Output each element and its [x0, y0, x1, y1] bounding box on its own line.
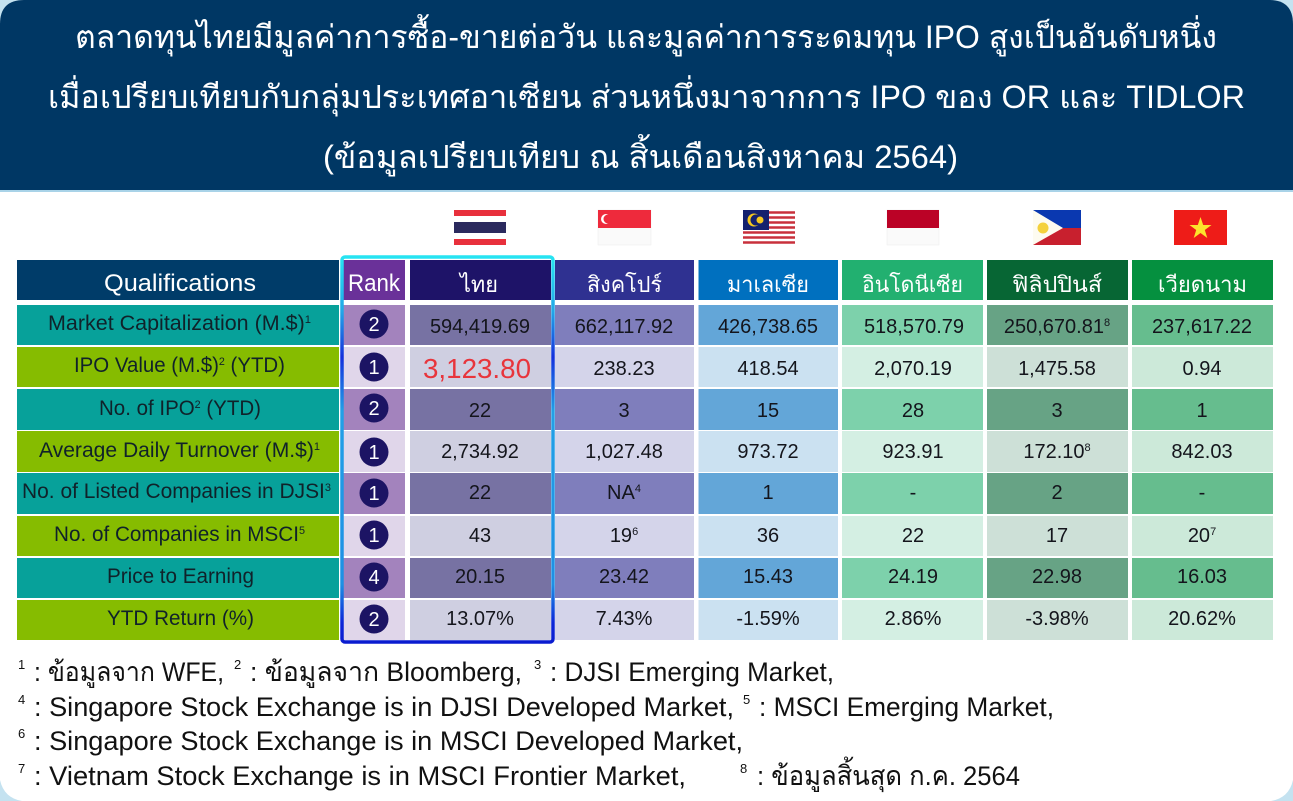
row: Market Capitalization: Market Capitalization (M.$)	[48, 312, 299, 335]
rank badges: 2	[368, 398, 380, 420]
row: Companies in MSCI: 7	[1210, 526, 1216, 538]
row: Market Capitalization: 1	[305, 314, 311, 326]
footnotes: 5	[743, 692, 750, 707]
row: Market Capitalization	[17, 305, 1273, 345]
rank badges: 2	[368, 609, 380, 631]
table header row	[17, 260, 1273, 300]
footnotes: : ข้อมูลสิ้นสุด ก.ค. 2564	[757, 756, 1020, 793]
row: Market Capitalization: 8	[1104, 317, 1110, 329]
row: Price to Earning: 15.43	[743, 566, 793, 588]
row: Companies in MSCI: No. of Companies in MSCI	[54, 523, 303, 546]
row: Market Capitalization: 237,617.22	[1152, 316, 1252, 338]
title banner: (ข้อมูลเปรียบเทียบ ณ สิ้นเดือนสิงหาคม 2564)	[323, 134, 958, 177]
row: Listed Companies in DJSI	[17, 473, 1273, 514]
row: No. of IPO: (YTD)	[201, 397, 261, 420]
footnotes: : ข้อมูลจาก WFE,	[34, 657, 224, 688]
row: No. of IPO	[17, 389, 1273, 430]
row: Market Capitalization: 518,570.79	[864, 316, 964, 338]
row: Price to Earning: 16.03	[1177, 566, 1227, 588]
row: Companies in MSCI: 6	[632, 526, 638, 538]
row: Listed Companies in DJSI: -	[910, 482, 916, 504]
rank badges: 1	[368, 525, 380, 547]
footnotes: : MSCI Emerging Market,	[759, 692, 1054, 722]
row: No. of IPO: 1	[1196, 400, 1208, 422]
row: YTD Return: -1.59%	[736, 608, 800, 630]
row: Average Daily Turnover: 1,027.48	[585, 441, 663, 463]
footnotes: : ข้อมูลจาก Bloomberg,	[250, 657, 522, 688]
table header row: ไทย	[458, 272, 498, 297]
table header row: อินโดนีเซีย	[862, 272, 963, 297]
row: No. of IPO: 15	[757, 400, 779, 422]
footnotes: : Singapore Stock Exchange is in MSCI Developed Market,	[34, 726, 743, 756]
footnotes: 3	[534, 657, 541, 672]
row: Average Daily Turnover: 842.03	[1171, 441, 1233, 463]
row: No. of IPO: 28	[902, 400, 924, 422]
row: Price to Earning	[17, 558, 1273, 598]
flag: Thailand	[454, 210, 506, 245]
table header row: Qualifications	[104, 270, 256, 297]
table header row: Rank	[348, 270, 401, 297]
row: Price to Earning: 22.98	[1032, 566, 1082, 588]
highlight box: Thailand column	[342, 257, 553, 642]
footnotes: : DJSI Emerging Market,	[550, 657, 834, 687]
row: IPO Value: 3,123.80	[423, 353, 531, 384]
row: Companies in MSCI: 5	[299, 525, 305, 537]
row: Market Capitalization: 426,738.65	[718, 316, 818, 338]
row: Market Capitalization: 594,419.69	[430, 316, 530, 338]
row: Average Daily Turnover: 973.72	[737, 441, 799, 463]
footnotes: 6	[18, 726, 25, 741]
footnotes: : Singapore Stock Exchange is in DJSI Developed Market,	[34, 692, 734, 722]
row: YTD Return: 20.62%	[1168, 608, 1236, 630]
footnotes	[18, 657, 1054, 793]
row: YTD Return: -3.98%	[1025, 608, 1089, 630]
row: IPO Value: 2,070.19	[874, 358, 952, 380]
row: IPO Value: 0.94	[1183, 358, 1221, 380]
footnotes: 4	[18, 692, 25, 707]
row: No. of IPO: 2	[195, 399, 201, 411]
footnotes: 1	[18, 657, 25, 672]
row: Average Daily Turnover: Average Daily Turnover (M.$)	[39, 439, 313, 462]
row: IPO Value: 1,475.58	[1018, 358, 1096, 380]
flag: Indonesia	[887, 210, 939, 245]
row: IPO Value: 238.23	[593, 358, 655, 380]
flag: Malaysia	[743, 210, 795, 245]
rank badges: 1	[368, 357, 380, 379]
row: Average Daily Turnover: 172.10	[1023, 441, 1085, 463]
row: Listed Companies in DJSI: -	[1199, 482, 1205, 504]
row: Price to Earning: Price to Earning	[107, 565, 254, 588]
row: No. of IPO: 3	[1051, 400, 1063, 422]
table header row: ฟิลิปปินส์	[1012, 272, 1103, 297]
table header row: มาเลเซีย	[727, 272, 809, 297]
title banner: ตลาดทุนไทยมีมูลค่าการซื้อ-ขายต่อวัน และมูลค่าการระดมทุน IPO สูงเป็นอันดับหนึ่ง	[75, 14, 1217, 57]
row: Listed Companies in DJSI: No. of Listed Companies in DJSI	[22, 480, 325, 503]
footnotes: 7	[18, 761, 25, 776]
row: Price to Earning: 20.15	[455, 566, 505, 588]
row: Price to Earning: 24.19	[888, 566, 938, 588]
row: Price to Earning: 23.42	[599, 566, 649, 588]
title banner	[0, 0, 1293, 190]
footnotes: : Vietnam Stock Exchange is in MSCI Frontier Market,	[34, 761, 686, 791]
row: Companies in MSCI: 43	[469, 525, 491, 547]
rank badges: 1	[368, 483, 380, 505]
row: YTD Return	[17, 600, 1273, 640]
rank badges	[360, 310, 388, 634]
row: Companies in MSCI: 19	[610, 525, 632, 547]
row: Companies in MSCI: 17	[1046, 525, 1068, 547]
row: Listed Companies in DJSI: NA	[607, 482, 635, 504]
row: No. of IPO: 3	[618, 400, 630, 422]
row: No. of IPO: 22	[469, 400, 491, 422]
table header row: สิงคโปร์	[587, 272, 662, 297]
row: IPO Value: (YTD)	[225, 354, 285, 377]
row: Companies in MSCI: 36	[757, 525, 779, 547]
footnotes: 8	[740, 761, 747, 776]
row: Market Capitalization: 662,117.92	[575, 316, 673, 338]
row: Listed Companies in DJSI: 4	[635, 483, 641, 495]
table header row: เวียดนาม	[1158, 272, 1247, 297]
footnotes: 2	[234, 657, 241, 672]
row: YTD Return: 7.43%	[596, 608, 653, 630]
row: Average Daily Turnover	[17, 431, 1273, 472]
row: No. of IPO: No. of IPO	[99, 397, 197, 420]
row: Market Capitalization: 250,670.81	[1004, 316, 1104, 338]
row: IPO Value: IPO Value (M.$)	[74, 354, 223, 377]
flag: Vietnam	[1174, 210, 1227, 245]
row: YTD Return: YTD Return (%)	[107, 607, 254, 630]
row: IPO Value	[17, 347, 1273, 387]
rank badges: 1	[368, 442, 380, 464]
flag: Singapore	[598, 210, 651, 245]
row: Average Daily Turnover: 1	[314, 441, 320, 453]
row: YTD Return: 13.07%	[446, 608, 514, 630]
row: Companies in MSCI: 20	[1188, 525, 1210, 547]
row: Average Daily Turnover: 8	[1085, 442, 1091, 454]
row: YTD Return: 2.86%	[885, 608, 942, 630]
row: Listed Companies in DJSI: 3	[325, 482, 331, 494]
row: Companies in MSCI	[17, 516, 1273, 556]
row: Listed Companies in DJSI: 1	[762, 482, 774, 504]
row: Listed Companies in DJSI: 22	[469, 482, 491, 504]
row: IPO Value: 2	[219, 356, 225, 368]
row: IPO Value: 418.54	[737, 358, 799, 380]
row: Average Daily Turnover: 2,734.92	[441, 441, 519, 463]
row: Average Daily Turnover: 923.91	[882, 441, 944, 463]
rank badges: 4	[368, 567, 380, 589]
row: Companies in MSCI: 22	[902, 525, 924, 547]
rank badges: 2	[368, 314, 380, 336]
row: Listed Companies in DJSI: 2	[1051, 482, 1063, 504]
title banner: เมื่อเปรียบเทียบกับกลุ่มประเทศอาเซียน ส่วนหนึ่งมาจากการ IPO ของ OR และ TIDLOR	[48, 75, 1245, 117]
flag: Philippines	[1033, 210, 1081, 245]
